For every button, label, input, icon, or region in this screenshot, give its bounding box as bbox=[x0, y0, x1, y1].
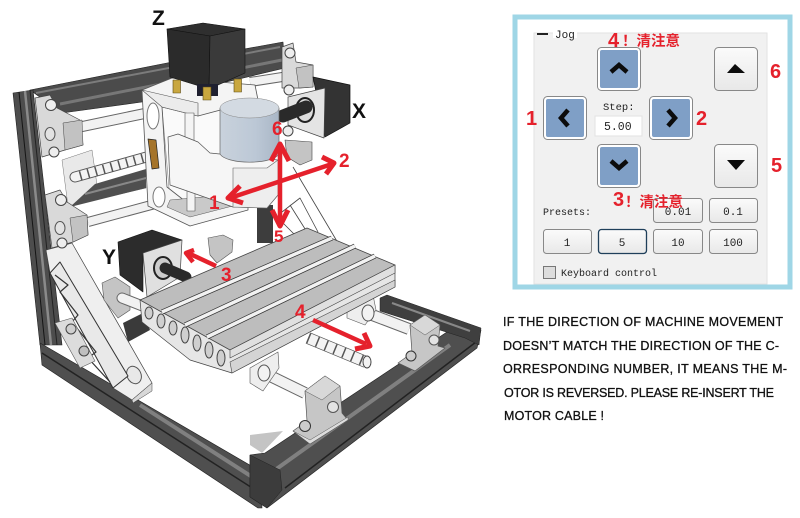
arrow 4 bbox=[313, 320, 370, 349]
warning text block: OTOR IS REVERSED. PLEASE RE-INSERT THE bbox=[504, 386, 774, 400]
preset 5 selected: 5 bbox=[619, 238, 625, 250]
red label 1: 1 bbox=[526, 108, 537, 130]
warning text block: MOTOR CABLE ! bbox=[504, 409, 604, 423]
arrow 3 bbox=[186, 250, 216, 266]
warning text block bbox=[503, 315, 787, 423]
red label 2: 2 bbox=[696, 108, 707, 130]
Z carriage plate bbox=[142, 78, 258, 226]
preset 10 bbox=[654, 230, 702, 254]
jog heading: Jog bbox=[555, 30, 575, 42]
button: z down bbox=[714, 144, 758, 188]
preset 10: 10 bbox=[671, 238, 685, 250]
frame base rails bbox=[40, 295, 481, 508]
machine number 5: 5 bbox=[274, 227, 283, 246]
arrow 5 and 6 bbox=[271, 144, 289, 226]
button: down bbox=[598, 144, 640, 188]
red label 4 with note: ！清注意 bbox=[622, 32, 680, 50]
axis label Y: Y bbox=[102, 246, 116, 269]
Y stepper motor bbox=[118, 230, 186, 297]
X axis rods and brackets bbox=[35, 43, 313, 248]
red label 4 with note: 4 bbox=[608, 30, 620, 52]
arrow 1 and 2 bbox=[228, 157, 334, 203]
red label 4 with note bbox=[608, 30, 680, 52]
machine number 2: 2 bbox=[339, 151, 350, 172]
machine number 4: 4 bbox=[295, 302, 306, 323]
presets label: Presets: bbox=[543, 208, 591, 219]
red arrows with numbers on machine bbox=[186, 144, 370, 349]
preset 0.01: 0.01 bbox=[665, 207, 692, 219]
step input bbox=[595, 116, 642, 136]
step label: Step: bbox=[603, 102, 635, 114]
red label 3 with note: ！清注意 bbox=[625, 193, 683, 211]
red label 3 with note: 3 bbox=[613, 189, 624, 211]
keyboard control checkbox: Keyboard control bbox=[561, 268, 657, 280]
preset 0.1 bbox=[710, 198, 758, 222]
machine number 3: 3 bbox=[221, 265, 232, 286]
button: right bbox=[650, 96, 692, 140]
warning text block: DOESN’T MATCH THE DIRECTION OF THE C- bbox=[503, 339, 779, 353]
preset 5 selected bbox=[598, 230, 646, 254]
work table bbox=[140, 228, 395, 373]
step input: 5.00 bbox=[604, 121, 632, 134]
button: z up bbox=[714, 48, 758, 90]
preset 100: 100 bbox=[723, 238, 743, 250]
red label 5: 5 bbox=[771, 155, 782, 177]
button: left bbox=[544, 96, 586, 140]
CNC machine illustration bbox=[13, 7, 481, 508]
X stepper motor bbox=[283, 77, 350, 138]
red label 3 with note bbox=[613, 189, 683, 211]
button: up bbox=[598, 48, 640, 90]
Y rail holder: right bbox=[398, 315, 445, 371]
preset 0.01 bbox=[654, 198, 702, 222]
Z stepper motor bbox=[167, 23, 245, 100]
axis label X: X bbox=[352, 100, 366, 123]
preset 1: 1 bbox=[564, 238, 571, 250]
Y rail holder: front bbox=[293, 376, 348, 444]
back rail bbox=[30, 42, 285, 207]
preset 100 bbox=[710, 230, 758, 254]
left vertical rail bbox=[13, 90, 62, 345]
keyboard control checkbox bbox=[544, 266, 657, 280]
X lead screw bbox=[75, 156, 150, 177]
panel: jog control bbox=[515, 17, 790, 287]
machine number 6: 6 bbox=[272, 119, 283, 140]
preset 0.1: 0.1 bbox=[723, 207, 743, 219]
spindle bbox=[168, 98, 279, 243]
warning text block: ORRESPONDING NUMBER, IT MEANS THE M- bbox=[503, 362, 787, 376]
preset 1 bbox=[544, 230, 592, 254]
Y axis holders and rods bbox=[102, 235, 409, 393]
machine number 1: 1 bbox=[209, 193, 220, 214]
warning text block: IF THE DIRECTION OF MACHINE MOVEMENT bbox=[503, 315, 783, 329]
axis label Z: Z bbox=[152, 7, 165, 30]
left triangular strut bbox=[46, 243, 152, 403]
right strut bbox=[282, 167, 338, 243]
red label 6: 6 bbox=[770, 61, 781, 83]
